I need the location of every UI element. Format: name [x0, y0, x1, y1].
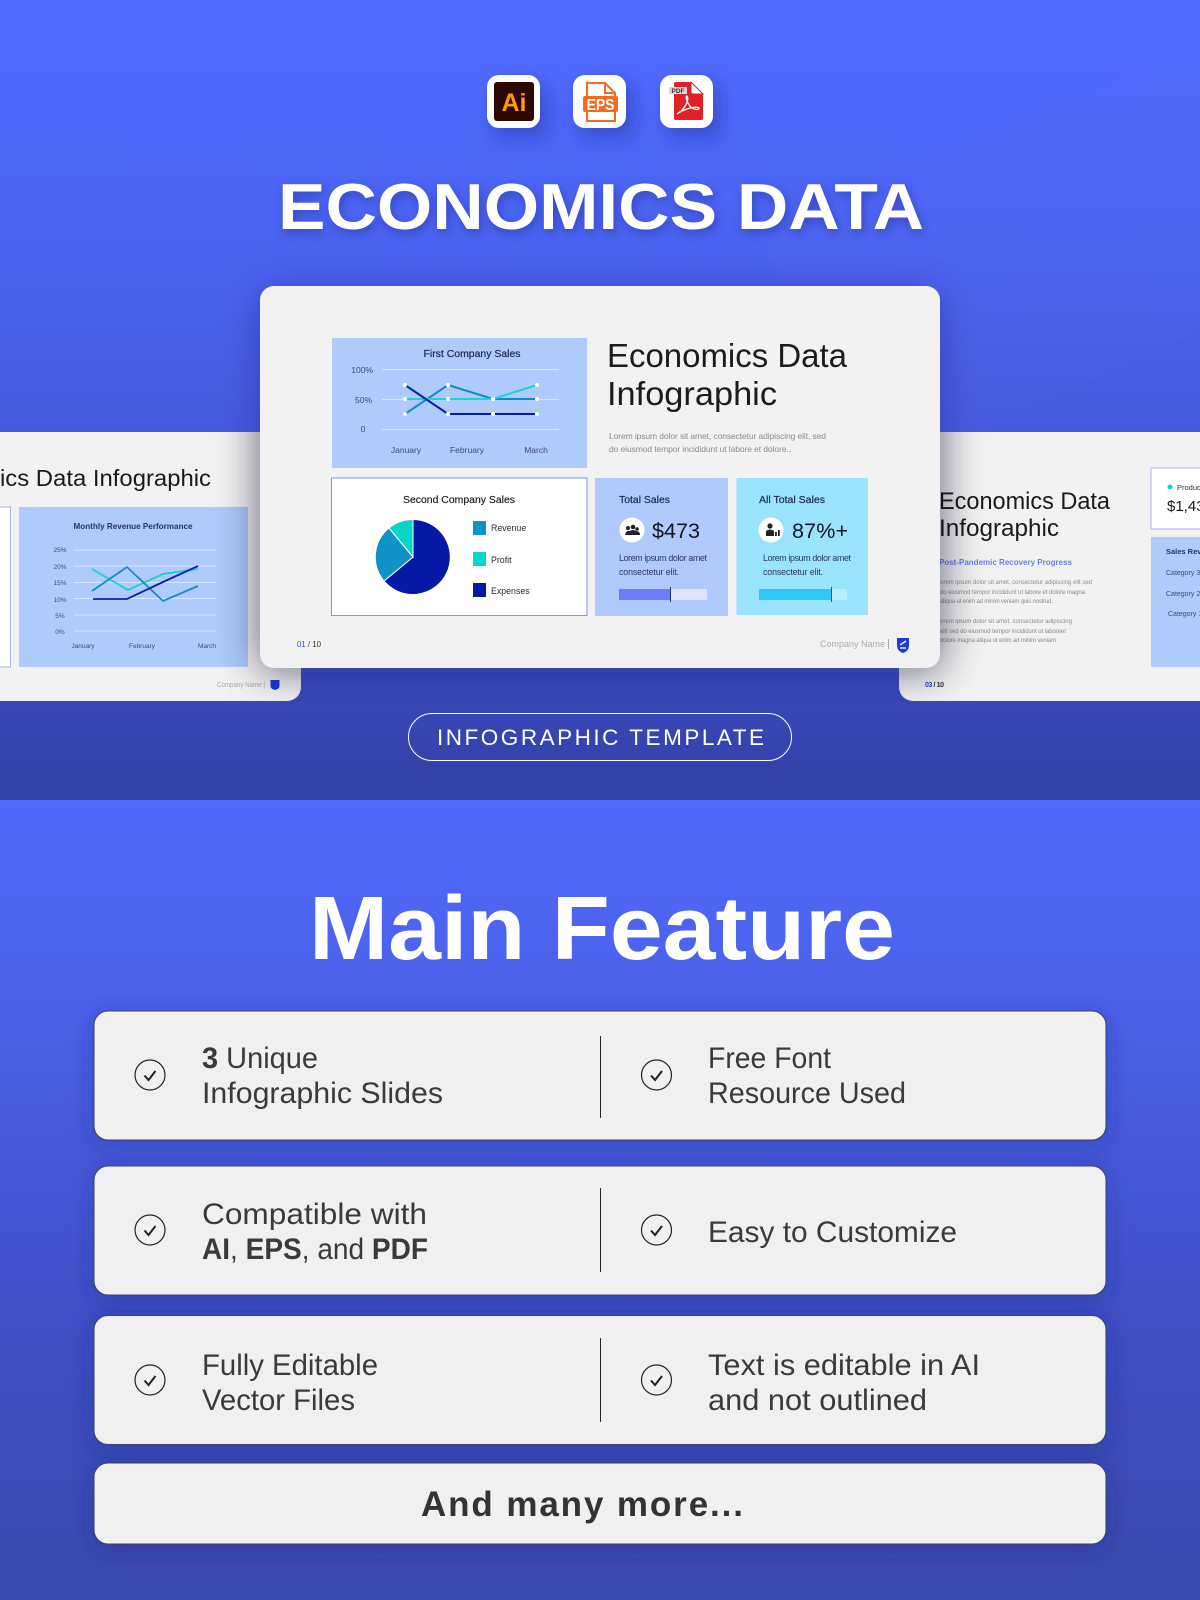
line chart: monthly revenue: 15%	[53, 580, 67, 587]
feature text: not outlined	[708, 1349, 980, 1417]
line chart: first company sales	[332, 338, 587, 468]
feature text: compatibility: Compatible with	[202, 1198, 427, 1231]
feature text: compatibility: AI, EPS, and PDF	[202, 1233, 428, 1266]
pie chart panel: second company sales: Second Company Sales	[403, 495, 515, 506]
feature text: unique slides: 3 Unique	[202, 1042, 318, 1075]
panel: main slide	[260, 286, 940, 668]
heading: main feature: Main Feature	[309, 879, 895, 979]
icon: check	[135, 1365, 165, 1395]
body copy: do eiusmod tempor incididunt ut labore et dolore magna	[940, 590, 1086, 596]
slide heading	[607, 337, 848, 412]
subtitle: Post-Pandemic Recovery Progress	[939, 557, 1072, 567]
stat card: total sales: Lorem ipsum dolor amet	[619, 553, 708, 563]
footer: company name: Company Name |	[217, 682, 265, 689]
legend: Expenses	[491, 586, 530, 596]
line chart: first company sales: 0	[361, 424, 366, 434]
icon: person with chart	[758, 518, 784, 542]
feature text: compatibility	[202, 1198, 428, 1266]
icon: people	[620, 518, 644, 542]
slide heading: ics Data Infographic	[0, 465, 211, 491]
panel: and many more	[94, 1463, 1106, 1544]
panel: feature row 3	[94, 1316, 1106, 1444]
feature text: unique slides: Infographic Slides	[202, 1077, 443, 1110]
background: top section	[0, 0, 1200, 800]
icon: check	[135, 1215, 165, 1245]
icon: Adobe Illustrator	[487, 75, 540, 128]
title: ECONOMICS DATA	[278, 170, 924, 243]
line chart: monthly revenue	[19, 507, 248, 667]
line chart: first company sales: February	[450, 445, 485, 455]
stat card: all total sales: All Total Sales	[759, 494, 825, 506]
body copy: orem ipsum dolor sit amet, consectetur adipiscing	[940, 619, 1072, 625]
page number: 03 / 10	[925, 682, 944, 689]
line chart: monthly revenue: February	[129, 643, 156, 650]
icon: check	[642, 1215, 672, 1245]
line chart: first company sales: First Company Sales	[424, 349, 520, 360]
feature text: editable: Vector Files	[202, 1384, 355, 1417]
panel: feature row 1	[94, 1011, 1106, 1140]
page number: 01 / 10	[297, 639, 321, 649]
icon: check	[642, 1365, 672, 1395]
badge: infographic template: INFOGRAPHIC TEMPLATE	[437, 725, 764, 750]
stat card: all total sales: 87%+	[792, 519, 848, 543]
feature text: customize: Easy to Customize	[708, 1216, 957, 1249]
panel: right background slide: Infographic	[939, 515, 1059, 542]
stat card: total sales	[595, 478, 728, 616]
progress bar	[759, 587, 847, 602]
sales review panel	[1151, 537, 1200, 667]
body copy: dolore magna aliqua ut enim ad minim veniam	[940, 638, 1056, 644]
icon: check	[642, 1060, 672, 1090]
line chart: monthly revenue: 0%	[55, 629, 65, 636]
panel: right background slide	[899, 432, 1200, 701]
icon: Adobe Illustrator: Ai	[502, 89, 526, 117]
line chart: first company sales: 50%	[355, 395, 372, 405]
line chart: monthly revenue: January	[71, 643, 95, 650]
sales review panel: Category 3	[1166, 570, 1200, 577]
stat card: all total sales: Lorem ipsum dolor amet	[763, 553, 852, 563]
line chart: monthly revenue: March	[198, 643, 216, 650]
line chart: first company sales: 100%	[351, 365, 373, 375]
line chart: monthly revenue: 25%	[53, 547, 67, 554]
feature text: unique slides	[202, 1042, 443, 1110]
progress bar	[619, 587, 707, 602]
footer: company name: Company Name	[820, 639, 885, 649]
panel: and many more: And many more...	[421, 1485, 743, 1524]
background: bottom section	[0, 800, 1200, 1600]
legend	[473, 521, 530, 597]
body copy: do eiusmod tempor incididunt ut labore et dolore..	[609, 444, 791, 454]
slide heading: Economics Data	[939, 488, 1111, 515]
body copy	[609, 431, 826, 454]
feature text: not outlined: Text is editable in AI	[708, 1349, 980, 1382]
feature text: editable: Fully Editable	[202, 1349, 378, 1382]
body copy: Lorem ipsum dolor sit amet, consectetur adipiscing elit, sed	[609, 431, 826, 441]
feature text: free font: Free Font	[708, 1042, 832, 1075]
feature text: free font: Resource Used	[708, 1077, 906, 1110]
panel: feature row 2	[94, 1166, 1106, 1295]
slide heading: Economics Data	[607, 337, 848, 374]
legend: Profit	[491, 555, 512, 565]
stat card: total sales: consectetur elit.	[619, 567, 679, 577]
body copy: aliqua ut enim ad minim veniam quis nostrud.	[940, 599, 1053, 605]
pie chart	[375, 519, 450, 594]
logo: shield	[270, 680, 280, 690]
body copy	[940, 580, 1092, 644]
product stat card	[1151, 468, 1200, 529]
feature text: editable	[202, 1349, 378, 1417]
white panel edge	[0, 507, 10, 667]
line chart: first company sales: March	[524, 445, 548, 455]
file format icons	[487, 75, 713, 128]
pie chart panel: second company sales	[332, 478, 587, 616]
sales review panel: Category 2	[1166, 591, 1200, 598]
icon: PDF file: PDF	[672, 88, 685, 95]
line chart: monthly revenue: 10%	[53, 597, 67, 604]
stat card: total sales: $473	[652, 519, 700, 543]
feature text: not outlined: and not outlined	[708, 1384, 927, 1417]
line chart: monthly revenue: 5%	[55, 613, 65, 620]
body copy: orem ipsum dolor sit amet, consectetur adipiscing elit sed	[940, 580, 1092, 586]
icon: EPS file: EPS	[586, 97, 615, 114]
icon: PDF file	[660, 75, 713, 128]
line chart: first company sales: January	[391, 445, 422, 455]
logo: shield	[888, 638, 909, 653]
icon: check	[135, 1060, 165, 1090]
panel: left background slide	[0, 432, 301, 701]
stat card: total sales: Total Sales	[619, 494, 670, 506]
stat card: all total sales: consectetur elit.	[763, 567, 823, 577]
line chart: monthly revenue: 20%	[53, 564, 67, 571]
line chart: monthly revenue: Monthly Revenue Performance	[74, 521, 193, 531]
slide heading: Infographic	[607, 375, 777, 412]
badge: infographic template	[408, 714, 792, 760]
stat card: all total sales	[736, 478, 868, 615]
icon: EPS file	[573, 75, 626, 128]
body copy: elit sed do eiusmod tempor incididunt ut laboreet	[940, 629, 1066, 635]
feature text: free font	[708, 1042, 906, 1110]
legend: Revenue	[491, 523, 526, 533]
